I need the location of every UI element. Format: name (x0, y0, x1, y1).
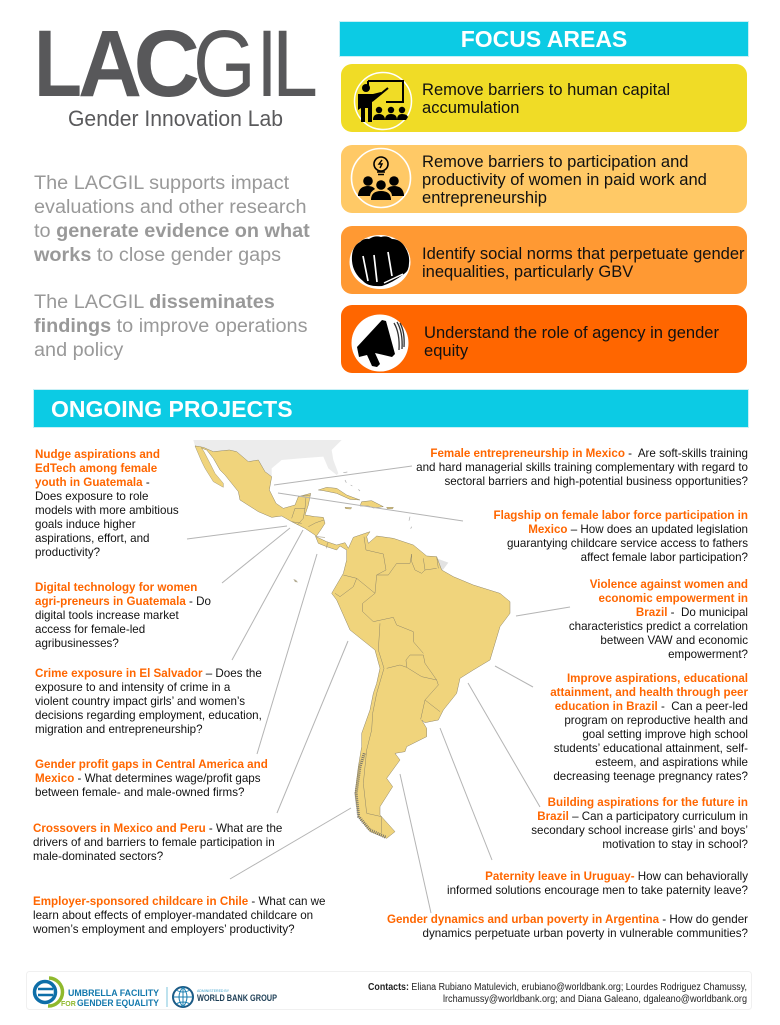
text: human capital (422, 80, 670, 117)
text: paid work: entrepreneurship (422, 188, 547, 207)
project: Crime exposure: Crime exposure in El Salvador – Does the (35, 667, 262, 680)
project: Employer childcare: women’s employment and employers’ productivity? (33, 923, 295, 936)
logo: Umbrella Facility for Gender Equality: GENDER EQUALITY (77, 998, 159, 1008)
project: Gender profit gaps (35, 758, 268, 799)
logo: LACGIL Gender Innovation Lab (34, 20, 318, 131)
map: Latin America with leader lines (187, 440, 570, 914)
text: paid work (422, 152, 707, 207)
project: Employer childcare: Employer-sponsored childcare in Chile - What can we (33, 895, 326, 908)
project: Digital technology: Digital technology for women (35, 581, 197, 594)
footer (26, 971, 752, 1010)
text block: LACGIL disseminates findings: and policy (34, 339, 123, 361)
text: paid work: productivity of women in paid work and (422, 170, 707, 189)
heading: ongoing projects (34, 390, 748, 427)
text block: LACGIL supports research: evaluations and other research (34, 196, 306, 218)
panel: social norms (341, 226, 747, 294)
project: Flagship labor force: Flagship on female labor force participation in (494, 509, 748, 522)
project: Violence against women: between VAW and economic (600, 634, 748, 647)
project: Nudge aspirations (35, 448, 179, 559)
logo: Umbrella Facility for Gender Equality: FOR (61, 1001, 76, 1008)
project: Improve aspirations: Improve aspirations, educational (567, 672, 748, 685)
project: Flagship labor force: affect female labor participation? (581, 551, 748, 564)
text: agency: Understand the role of agency in gender (424, 323, 719, 342)
logo: LACGIL Gender Innovation Lab: Gender Innovation Lab (68, 106, 283, 131)
project: Violence against women: economic empowerment in (599, 592, 748, 605)
project: Improve aspirations: attainment, and health through peer (550, 686, 748, 699)
project: Improve aspirations: decreasing teenage pregnancy rates? (553, 770, 748, 783)
project: Crossovers: Crossovers in Mexico and Peru - What are the (33, 822, 282, 835)
project: Crime exposure: exposure to and intensity of crime in a (35, 681, 230, 694)
project: Nudge aspirations: EdTech among female (35, 462, 157, 475)
project: Crime exposure: decisions regarding employment, education, (35, 709, 262, 722)
project: Digital technology (35, 581, 211, 650)
icon: lightbulb with group (350, 148, 412, 208)
heading: focus areas (340, 22, 748, 56)
project: Crime exposure (35, 667, 262, 736)
project: Paternity leave (447, 870, 748, 897)
heading: focus areas: FOCUS AREAS (461, 26, 627, 52)
project: Flagship labor force: Mexico – How does an updated legislation (528, 523, 748, 536)
text block: LACGIL supports research: to generate evidence on what (34, 220, 310, 242)
project: Gender profit gaps: Mexico - What determines wage/profit gaps (35, 772, 261, 785)
logo: World Bank Group: WORLD BANK GROUP (197, 993, 277, 1003)
text block: LACGIL disseminates findings: The LACGIL disseminates (34, 291, 275, 313)
project: Building aspirations (531, 796, 748, 851)
project: Crime exposure: migration and entrepreneurship? (35, 723, 203, 736)
project: Gender dynamics: Gender dynamics and urban poverty in Argentina - How do gender (387, 913, 748, 926)
text: human capital: Remove barriers to human capital (422, 80, 670, 99)
text block: LACGIL supports research: The LACGIL supports impact (34, 172, 289, 194)
panel: human capital (341, 64, 747, 132)
project: Paternity leave: informed solutions encourage men to take paternity leave? (447, 884, 748, 897)
project: Flagship labor force (494, 509, 748, 564)
project: Crossovers (33, 822, 282, 863)
project: Gender profit gaps: Gender profit gaps in Central America and (35, 758, 268, 771)
icon: fist (350, 235, 410, 289)
project: Improve aspirations (550, 672, 748, 783)
project: Gender profit gaps: between female- and male-owned firms? (35, 786, 244, 799)
project: Building aspirations: Building aspirations for the future in (548, 796, 748, 809)
project: Crossovers: drivers of and barriers to female participation in (33, 836, 275, 849)
project: Improve aspirations: goal setting improve high school (582, 728, 748, 741)
project: Digital technology: agribusinesses? (35, 637, 119, 650)
logo: World Bank Group: ADMINISTERED BY (197, 989, 230, 993)
text: social norms: Identify social norms that perpetuate gender (422, 244, 745, 263)
project: Crime exposure: violent country impact girls’ and women’s (35, 695, 245, 708)
project: Digital technology: access for female-led (35, 623, 145, 636)
project: Nudge aspirations: aspirations, effort, and (35, 532, 150, 545)
project: Nudge aspirations: youth in Guatemala - (35, 476, 150, 489)
leader lines (187, 466, 570, 913)
project: Nudge aspirations: Does exposure to role (35, 490, 148, 503)
text block: LACGIL supports research (34, 172, 310, 266)
project: Improve aspirations: program on reproductive health and (564, 714, 748, 727)
project: Nudge aspirations: models with more ambitious (35, 504, 179, 517)
project: Violence against women (569, 578, 748, 661)
project: Improve aspirations: students’ educational attainment, self- (554, 742, 748, 755)
project: Building aspirations: motivation to stay in school? (602, 838, 748, 851)
project: Female entrepreneurship: Female entrepreneurship in Mexico - Are soft-skills training (430, 447, 748, 460)
heading: ongoing projects: ONGOING PROJECTS (51, 396, 293, 422)
project: Violence against women: Brazil - Do municipal (636, 606, 748, 619)
project: Digital technology: agri-preneurs in Guatemala - Do (35, 595, 211, 608)
project: Improve aspirations: education in Brazil - Can a peer-led (555, 700, 748, 713)
icon: teacher with audience (354, 72, 412, 130)
project: Digital technology: digital tools increase market (35, 609, 179, 622)
project: Nudge aspirations: Nudge aspirations and (35, 448, 160, 461)
project: Nudge aspirations: productivity? (35, 546, 100, 559)
text: social norms (422, 244, 745, 281)
panel: agency (341, 305, 747, 373)
project: Building aspirations: Brazil – Can a participatory curriculum in (537, 810, 748, 823)
text: agency (424, 323, 719, 360)
project: Building aspirations: secondary school increase girls’ and boys’ (531, 824, 748, 837)
text block: LACGIL disseminates findings: findings to improve operations (34, 315, 308, 337)
logo: Umbrella Facility for Gender Equality: UMBRELLA FACILITY (68, 988, 159, 998)
project: Violence against women: Violence against women and (590, 578, 748, 591)
project: Crossovers: male-dominated sectors? (33, 850, 163, 863)
text: agency: equity (424, 341, 468, 360)
logo: Umbrella Facility for Gender Equality (34, 978, 159, 1008)
text: human capital: accumulation (422, 98, 519, 117)
project: Employer childcare: learn about effects of employer-mandated childcare on (33, 909, 313, 922)
icon: megaphone (352, 314, 408, 372)
project: Female entrepreneurship: and hard managerial skills training complementary with regard to (416, 461, 748, 474)
text: social norms: inequalities, particularly GBV (422, 262, 633, 281)
project: Paternity leave: Paternity leave in Uruguay- How can behaviorally (485, 870, 748, 883)
project: Female entrepreneurship: sectoral barriers and high-potential business opportunities? (444, 475, 748, 488)
text block: LACGIL supports research: works to close gender gaps (34, 244, 281, 266)
logo: World Bank Group (173, 987, 277, 1007)
project: Violence against women: characteristics predict a correlation (569, 620, 748, 633)
project: Female entrepreneurship (416, 447, 748, 488)
project: Nudge aspirations: goals induce higher (35, 518, 136, 531)
panel: paid work and entrepreneurship (341, 145, 747, 213)
map shapes (193, 440, 510, 838)
text: paid work: Remove barriers to participation and (422, 152, 688, 171)
project: Employer childcare (33, 895, 326, 936)
project: Improve aspirations: esteem, and aspirations while (595, 756, 748, 769)
project: Flagship labor force: guarantying childcare service access to fathers (507, 537, 748, 550)
project: Gender dynamics (387, 913, 748, 940)
project: Gender dynamics: dynamics perpetuate urban poverty in vulnerable communities? (423, 927, 748, 940)
project: Violence against women: empowerment? (668, 648, 748, 661)
text block: LACGIL disseminates findings (34, 291, 308, 361)
text: contacts (368, 982, 747, 1005)
